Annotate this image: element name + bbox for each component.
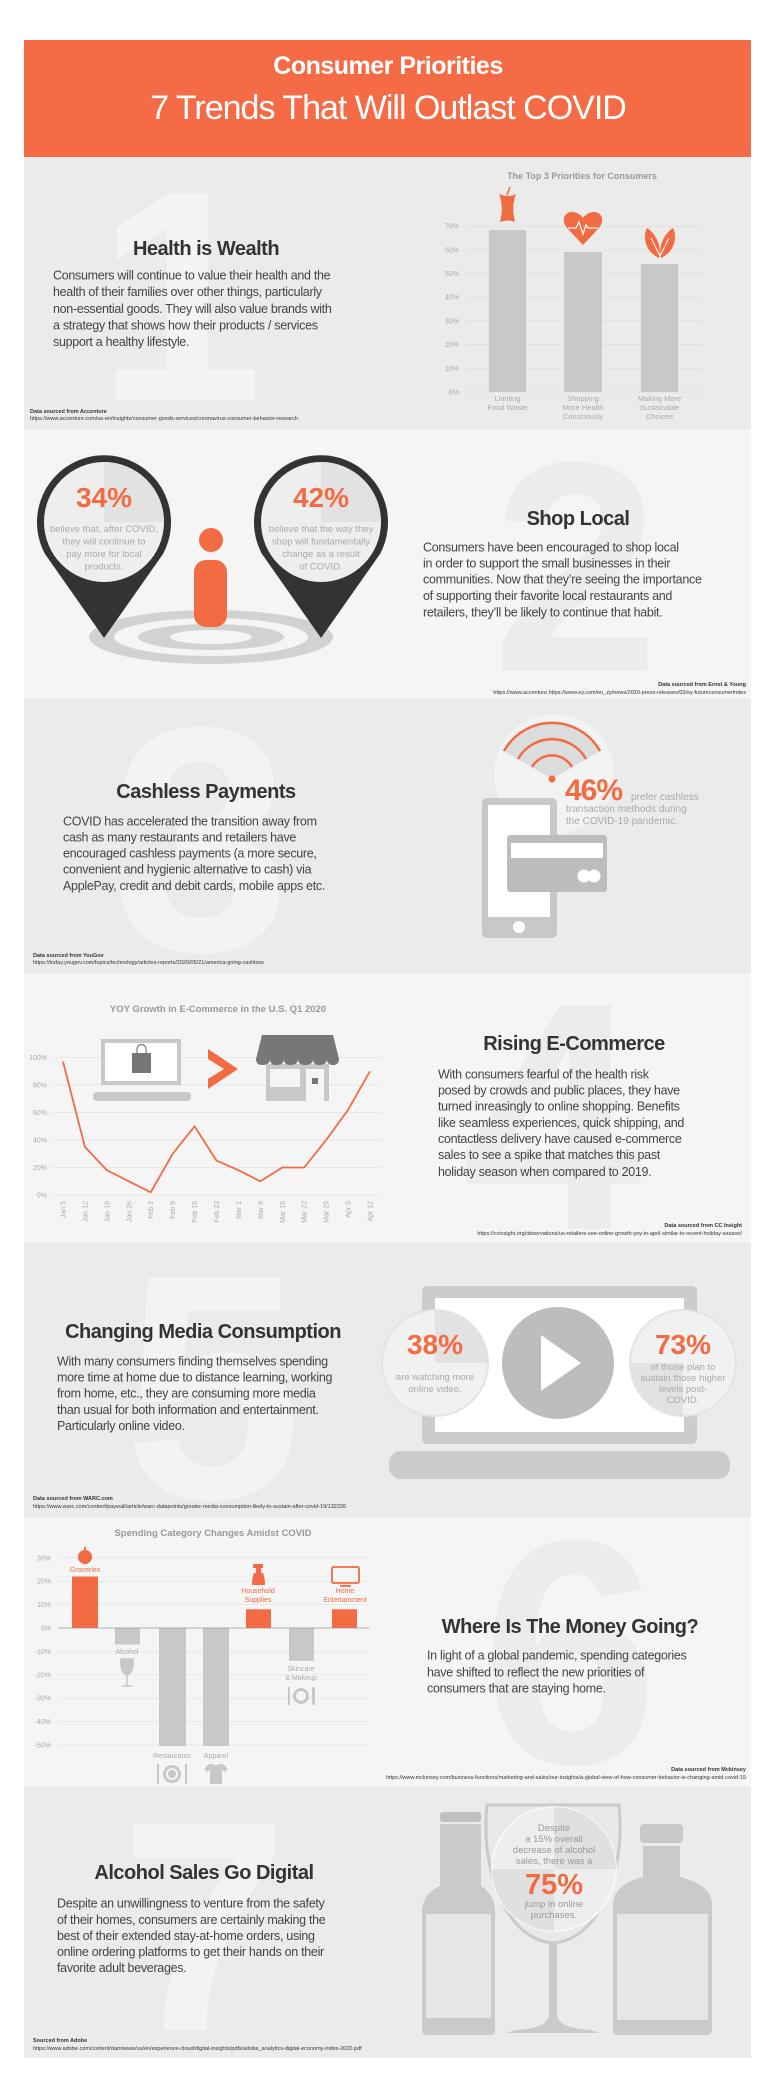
heading: shop local: Shop Local xyxy=(527,508,629,530)
text block: cashless: cash as many restaurants and retailers have xyxy=(63,830,296,844)
heading: health is wealth: Health is Wealth xyxy=(133,238,279,260)
bar chart: spending categories: -40% xyxy=(35,1719,51,1726)
source: adobe: Sourced from Adobe xyxy=(33,2038,87,2044)
icon: wine glass with stat: sales, there was a xyxy=(516,1856,593,1867)
source: yougov: https://today.yougov.com/topics/technology/articles-reports/2020/05/21/america-going-cashless xyxy=(33,960,264,966)
line chart: yoy growth: Jan 19 xyxy=(104,1201,111,1222)
text block: shop local: in order to support the small businesses in their xyxy=(423,556,670,570)
subtitle: 7 Trends That Will Outlast COVID xyxy=(150,89,626,127)
source: warc: https://www.warc.com/content/paywall/article/warc-datapoints/greater-media-consumption-likely-to-sustain-after-covid-19/132226 xyxy=(33,1504,346,1510)
header banner xyxy=(24,40,751,157)
heading: money going: Where Is The Money Going? xyxy=(442,1616,698,1638)
icon: wine glass with stat: Despite xyxy=(538,1823,570,1834)
text block: e-commerce: posed by crowds and public places, they have xyxy=(438,1084,680,1098)
pin: 34% xyxy=(37,455,171,638)
line chart: yoy growth: 60% xyxy=(33,1110,47,1117)
bar chart: spending categories: Household xyxy=(241,1588,275,1595)
bar chart: spending categories: Groceries xyxy=(70,1567,101,1574)
icon: right bottle xyxy=(613,1824,712,2035)
bar chart: top 3 priorities: More Health xyxy=(563,403,603,412)
pin: 34%: they will continue to xyxy=(63,536,145,548)
bar chart: top 3 priorities: 0% xyxy=(449,390,459,396)
text block: money: consumers that are staying home. xyxy=(427,1682,606,1696)
source: accenture: Data sourced from Accenture xyxy=(30,409,107,415)
stat: 73%: 73% xyxy=(655,1329,711,1360)
bar chart: top 3 priorities: Making More xyxy=(638,394,681,403)
line chart: yoy growth: Feb 23 xyxy=(214,1201,221,1223)
panel: changing media consumption: 5 xyxy=(124,1208,302,1566)
icon: apple xyxy=(78,1547,92,1564)
icon: tv xyxy=(332,1567,359,1587)
panel: cashless payments xyxy=(24,660,751,1018)
panel: health is wealth: 1 xyxy=(97,128,263,464)
text block: e-commerce: contactless delivery have caused e-commerce xyxy=(438,1132,682,1146)
panel: shop local xyxy=(24,399,751,735)
stat: 46% xyxy=(565,774,699,827)
text block: media: Particularly online video. xyxy=(57,1419,185,1433)
bar chart: top 3 priorities: Food Waste xyxy=(487,403,528,412)
bar chart: spending categories: 20% xyxy=(37,1579,51,1586)
text block: e-commerce: sales to see a spike that matches this past xyxy=(438,1148,661,1162)
stat: 73%: levels post- xyxy=(659,1384,707,1395)
icon: wine glass with stat: a 15% overall xyxy=(525,1834,583,1845)
icon: left bottle xyxy=(422,1812,495,2035)
line chart: yoy growth: Apr 5 xyxy=(346,1201,353,1218)
text block: e-commerce: like seamless experiences, quick shipping, and xyxy=(438,1116,684,1130)
pin: 34%: pay more for local xyxy=(66,549,142,560)
bar chart: top 3 priorities: Sustainable xyxy=(640,403,679,412)
title: Consumer Priorities xyxy=(273,52,503,80)
line chart: yoy growth: Apr 12 xyxy=(368,1201,374,1222)
icon: credit card xyxy=(507,835,607,892)
bar chart: spending categories xyxy=(35,1528,369,1784)
icon: plate restaurants xyxy=(157,1764,187,1784)
icon: person xyxy=(194,528,227,627)
bar chart: top 3 priorities: Consciously xyxy=(563,412,603,421)
text block: alcohol: online ordering platforms to get their hands on their xyxy=(57,1945,324,1959)
bar chart: top 3 priorities: 50% xyxy=(445,271,459,278)
source: accenture: https://www.accenture.com/us-en/insights/consumer-goods-services/coronavirus-consumer-behavior-research xyxy=(30,416,298,422)
heading: cashless: Cashless Payments xyxy=(116,781,296,803)
icon: apple core xyxy=(499,187,516,222)
icon: wine glass with stat: jump in online xyxy=(524,1899,583,1910)
panel: alcohol sales go digital: 7 xyxy=(121,1758,287,2086)
icon: t-shirt xyxy=(204,1764,228,1784)
heading: alcohol: Alcohol Sales Go Digital xyxy=(94,1862,314,1884)
text block: e-commerce: With consumers fearful of the health risk xyxy=(438,1068,650,1082)
text block: shop local: communities. Now that they’re seeing the importance xyxy=(423,572,702,586)
text block: shop local: of supporting their favorite local restaurants and xyxy=(423,589,672,603)
bar chart: spending categories: Spending Category Changes Amidst COVID xyxy=(114,1528,312,1539)
source: yougov: Data sourced from YouGov xyxy=(33,953,105,959)
source: adobe: https://www.adobe.com/content/dam/www/us/en/experience-cloud/digital-insights/pdfs/adobe_analytics-digital-economy-index-2020.pdf xyxy=(33,2046,362,2052)
bar chart: spending categories: 0% xyxy=(41,1626,51,1632)
icon: wine glass with stat xyxy=(486,1805,620,2033)
panel: where is the money going: 6 xyxy=(481,1473,659,1831)
stat: 46%: transaction methods during xyxy=(566,804,687,815)
line chart: yoy growth: Jan 26 xyxy=(126,1201,133,1222)
line chart: yoy growth: 20% xyxy=(33,1165,47,1172)
panel: cashless payments: 3 xyxy=(113,660,291,1018)
icon: target rings xyxy=(89,610,333,664)
bar chart: spending categories: 10% xyxy=(37,1602,51,1609)
text block: e-commerce: holiday season when compared to 2019. xyxy=(438,1165,651,1179)
pin: 42%: believe that the way they xyxy=(269,524,374,535)
bar chart: top 3 priorities: The Top 3 Priorities for Consumers xyxy=(507,171,657,181)
arrow: chevron xyxy=(208,1049,238,1089)
icon: plate skincare xyxy=(288,1687,315,1705)
heading: media: Changing Media Consumption xyxy=(65,1321,341,1343)
bar chart: spending categories: Skincare xyxy=(287,1666,315,1673)
text block: money: have shifted to reflect the new priorities of xyxy=(427,1666,645,1680)
icon: wine glass with stat: 75% xyxy=(525,1869,583,1901)
line chart: yoy growth: Feb 2 xyxy=(148,1201,155,1219)
text block: health: a strategy that shows how their products / services xyxy=(53,318,318,332)
icon: spray bottle xyxy=(252,1564,265,1585)
icon: wifi signal xyxy=(494,714,614,834)
panel: where is the money going xyxy=(24,1473,751,1831)
stat: 38%: are watching more xyxy=(396,1372,474,1383)
line chart: yoy growth: YOY Growth in E-Commerce in the U.S. Q1 2020 xyxy=(110,1004,326,1015)
bar chart: top 3 priorities: Shopping xyxy=(567,394,599,403)
line chart: yoy growth: Feb 15 xyxy=(192,1201,199,1223)
text block: shop local: Consumers have been encouraged to shop local xyxy=(423,540,679,554)
text block: health: support a healthy lifestyle. xyxy=(53,335,189,349)
bar chart: spending categories: & Makeup xyxy=(285,1675,317,1682)
stat: 38% xyxy=(382,1310,488,1416)
stat: 38%: 38% xyxy=(407,1329,463,1360)
line chart: yoy growth: 80% xyxy=(33,1082,47,1090)
bar chart: spending categories: Home xyxy=(336,1588,354,1595)
text block: health: health of their families over other things, particularly xyxy=(53,285,323,299)
panel: rising e-commerce: 4 xyxy=(462,935,644,1298)
line chart: yoy growth: Mar 29 xyxy=(324,1201,331,1223)
stat: 73% xyxy=(630,1310,736,1416)
bar chart: spending categories: -20% xyxy=(35,1672,51,1679)
pin: 34%: believe that, after COVID, xyxy=(50,524,158,535)
text block: shop local: retailers, they’ll be likely to continue that habit. xyxy=(423,606,662,620)
stat: 46%: 46% xyxy=(565,774,622,807)
line chart: yoy growth: 40% xyxy=(33,1138,47,1144)
source: mckinsey: https://www.mckinsey.com/business-functions/marketing-and-sales/our-insights/a-global-view-of-how-consumer-behavior-is-changing-amid-covid-19 xyxy=(386,1775,746,1781)
icon: leaves xyxy=(645,228,675,258)
pin: 42%: of COVID. xyxy=(299,562,343,572)
bar chart: spending categories: Entertainment xyxy=(323,1597,367,1604)
source: ernst & young: https://www.accenture.https://www.ey.com/en_zy/news/2020-press-releases/03/ey-futureconsumerindex xyxy=(493,690,746,696)
text block: cashless: COVID has accelerated the transition away from xyxy=(63,814,317,828)
bar chart: top 3 priorities xyxy=(445,171,703,421)
pin: 42% xyxy=(254,455,388,638)
pin: 42%: shop will fundamentally xyxy=(272,536,370,548)
source: mckinsey: Data sourced from Mckinsey xyxy=(671,1767,747,1773)
bar chart: top 3 priorities: Limiting xyxy=(495,394,520,403)
text block: alcohol: favorite adult beverages. xyxy=(57,1961,186,1975)
bar chart: top 3 priorities: 20% xyxy=(445,342,459,349)
line chart: yoy growth: Jan 12 xyxy=(82,1201,89,1222)
icon: wine glass with stat: decrease of alcohol xyxy=(513,1845,595,1856)
bar chart: top 3 priorities: 30% xyxy=(445,318,459,325)
line chart: yoy growth: Feb 9 xyxy=(170,1201,177,1219)
icon: laptop with video xyxy=(389,1286,730,1479)
line chart: yoy growth: Mar 15 xyxy=(280,1201,287,1223)
stat: 73%: COVID. xyxy=(667,1395,699,1406)
stat: 73%: of those plan to xyxy=(651,1362,715,1373)
stat: 73%: sustain those higher xyxy=(640,1373,726,1384)
bar chart: spending categories: Restaurants xyxy=(153,1753,191,1760)
panel: alcohol sales go digital xyxy=(24,1758,751,2086)
bar chart: top 3 priorities: 40% xyxy=(445,295,459,302)
panel: changing media consumption xyxy=(24,1208,751,1566)
bar chart: spending categories: 30% xyxy=(37,1555,51,1562)
pin: 42%: 42% xyxy=(293,482,349,513)
bar chart: spending categories: Alcohol xyxy=(116,1649,139,1656)
text block: media: than usual for both information and entertainment. xyxy=(57,1403,319,1417)
bar chart: spending categories: Supplies xyxy=(245,1597,272,1604)
source: warc: Data sourced from WARC.com xyxy=(33,1496,113,1502)
text block: alcohol: best of their extended stay-at-home orders, using xyxy=(57,1929,315,1943)
icon: heart xyxy=(564,212,602,245)
text block: alcohol: of their homes, consumers are certainly making the xyxy=(57,1913,326,1927)
line chart: yoy growth: Mar 1 xyxy=(236,1201,243,1219)
panel: health is wealth xyxy=(24,128,751,464)
icon: wine glass xyxy=(121,1659,133,1686)
text block: media: With many consumers finding themselves spending xyxy=(57,1354,328,1368)
text block: media: from home, etc., they are consuming more media xyxy=(57,1386,316,1400)
line chart: yoy growth xyxy=(29,1004,381,1223)
bar chart: spending categories: -10% xyxy=(35,1649,51,1656)
text block: money: In light of a global pandemic, spending categories xyxy=(427,1648,687,1662)
bar chart: top 3 priorities: 10% xyxy=(445,366,459,373)
icon: laptop with bag xyxy=(93,1039,191,1101)
panel: shop local: 2 xyxy=(493,399,659,735)
source: cc insight: https://ccinsight.org/observations/us-retailers-see-online-growth-yoy-in-april-similar-to-recent-holiday-season/ xyxy=(477,1231,742,1237)
bar chart: top 3 priorities: Choices xyxy=(646,412,673,421)
text block: health: non-essential goods. They will also value brands with xyxy=(53,302,332,316)
line chart: yoy growth: 100% xyxy=(29,1055,47,1062)
text block: cashless: ApplePay, credit and debit cards, mobile apps etc. xyxy=(63,879,325,893)
source: ernst & young: Data sourced from Ernst & Young xyxy=(658,682,746,688)
icon: phone xyxy=(482,798,557,938)
heading: rising e-commerce: Rising E-Commerce xyxy=(483,1033,665,1055)
pin: 34%: 34% xyxy=(76,482,132,513)
line chart: yoy growth: Jan 5 xyxy=(60,1201,68,1218)
stat: 46%: prefer cashless xyxy=(631,792,699,803)
line chart: yoy growth: 0% xyxy=(37,1192,47,1200)
text block: alcohol: Despite an unwillingness to venture from the safety xyxy=(57,1896,326,1910)
stat: 46%: the COVID-19 pandemic. xyxy=(566,816,678,827)
text block: health: Consumers will continue to value their health and the xyxy=(53,268,331,282)
text block: e-commerce: turned inreasingly to online shopping. Benefits xyxy=(438,1100,680,1114)
bar chart: spending categories: Apparel xyxy=(204,1753,229,1760)
pin: 42%: change as a result xyxy=(282,549,360,560)
bar chart: top 3 priorities: 70% xyxy=(445,224,459,231)
bar chart: top 3 priorities: 60% xyxy=(445,247,459,254)
line chart: yoy growth: Mar 8 xyxy=(258,1201,265,1219)
text block: cashless: encouraged cashless payments (a more secure, xyxy=(63,846,317,860)
icon: storefront xyxy=(256,1035,339,1101)
source: cc insight: Data sourced from CC Insight xyxy=(664,1223,742,1229)
panel: rising e-commerce xyxy=(24,935,751,1298)
text block: media: more time at home due to distance learning, working xyxy=(57,1370,332,1384)
stat: 38%: online video. xyxy=(408,1384,462,1395)
icon: wine glass with stat: purchases. xyxy=(531,1910,577,1921)
line chart: yoy growth: Mar 22 xyxy=(302,1201,309,1223)
bar chart: spending categories: -30% xyxy=(35,1696,51,1703)
text block: cashless: convenient and hygienic alternative to cash) via xyxy=(63,862,312,876)
bar chart: spending categories: -50% xyxy=(35,1742,51,1750)
pin: 34%: products. xyxy=(84,562,124,572)
